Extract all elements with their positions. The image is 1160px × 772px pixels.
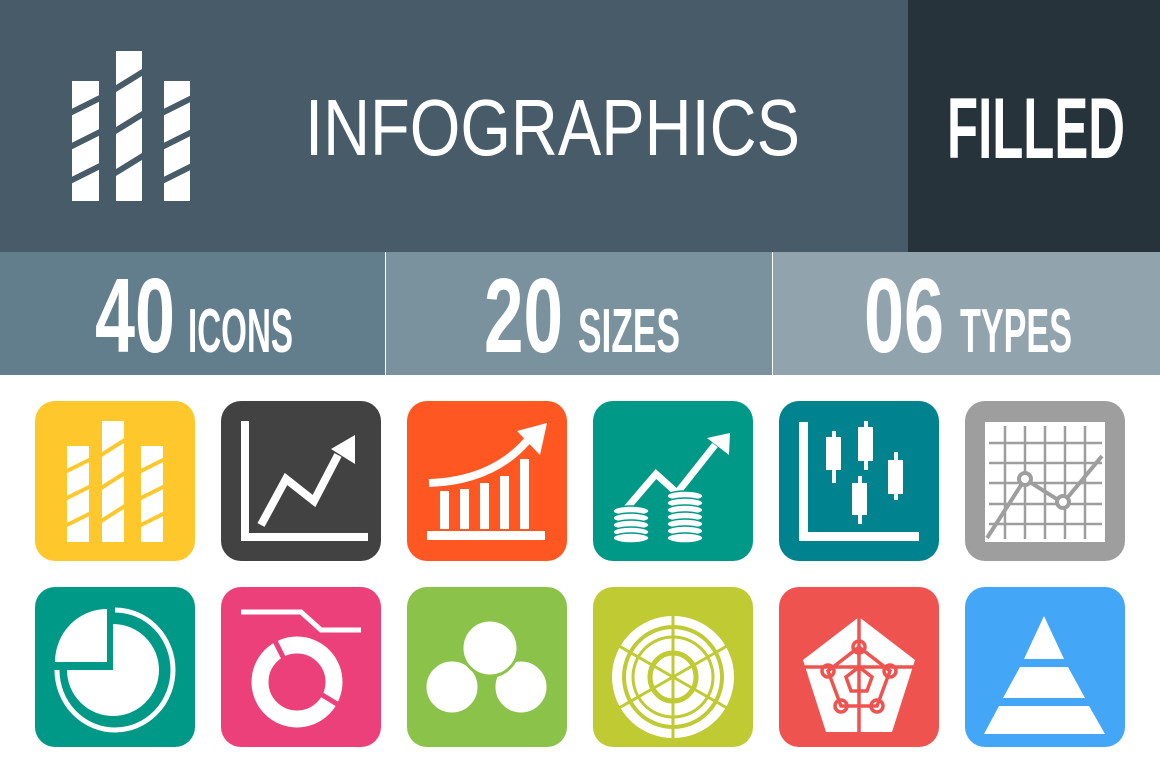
icon: line chart dark [221, 401, 381, 561]
stat: 40 icons: 40 [95, 257, 175, 375]
header logo icon [68, 51, 194, 201]
stat: 06 types: 06 [864, 257, 944, 375]
stat: 40 icons [0, 252, 385, 375]
icon: grid line chart gray [965, 401, 1125, 561]
stat: 20 sizes: SIZES [578, 297, 680, 366]
icon: bar chart yellow [35, 401, 195, 561]
icon: candlestick chart [779, 401, 939, 561]
stat: 20 sizes: 20 [484, 257, 563, 375]
title: INFOGRAPHICS [305, 83, 800, 172]
stat: 40 icons: ICONS [188, 297, 293, 366]
stat: 06 types: TYPES [960, 297, 1072, 366]
header band [0, 0, 908, 252]
icon: coins growth teal [593, 401, 753, 561]
icon: growth bars orange [407, 401, 567, 561]
filled box [908, 0, 1160, 252]
stat: 06 types [773, 252, 1160, 375]
icon: pentagon network red [779, 587, 939, 747]
icon: three circles green [407, 587, 567, 747]
icon: pyramid blue [965, 587, 1125, 747]
stat: 20 sizes [386, 252, 772, 375]
icon: radar target lime [593, 587, 753, 747]
icon: pie chart teal [35, 587, 195, 747]
icon: donut pink [221, 587, 381, 747]
